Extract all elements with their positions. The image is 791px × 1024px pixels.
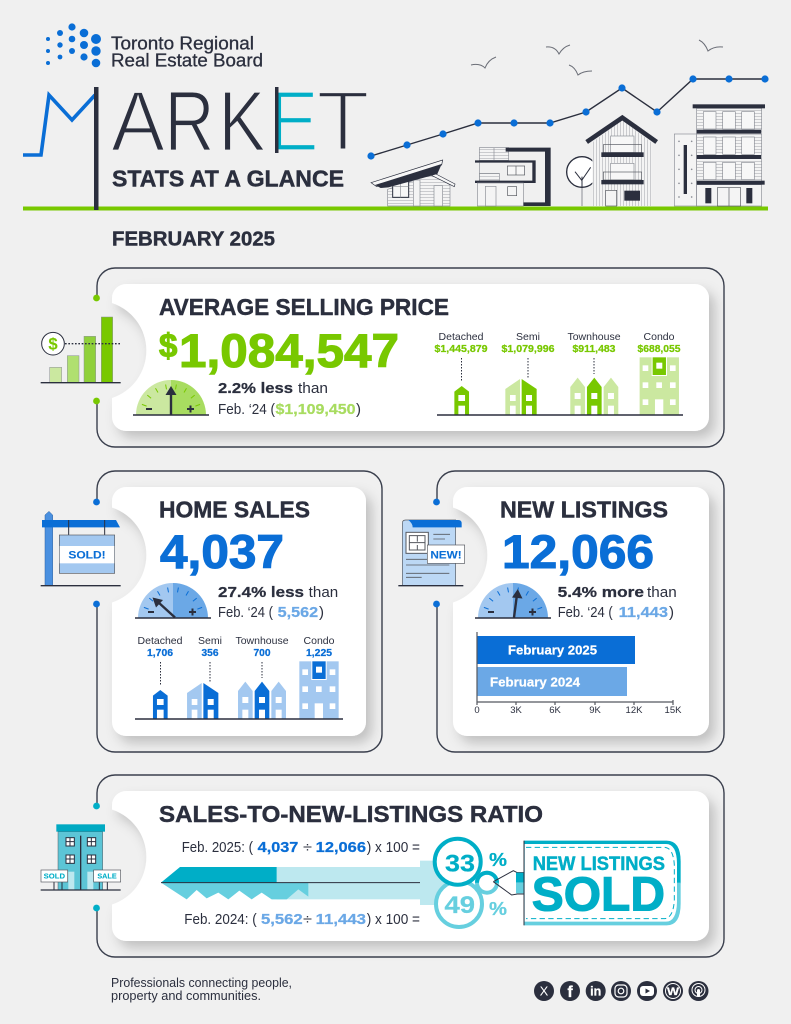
footer tagline bbox=[111, 976, 292, 1003]
comparison text: Feb. ‘24 ( bbox=[218, 401, 275, 418]
green ground line bbox=[23, 206, 768, 210]
bar chart: new listings comparison: 9K bbox=[589, 705, 601, 716]
result rings 33% and 49%: % bbox=[489, 899, 507, 919]
big number: 1,084,547 bbox=[179, 324, 399, 377]
logo: Toronto Regional Real Estate Board: Real Estate Board bbox=[111, 50, 263, 70]
formula 2025: 4,037 bbox=[258, 840, 298, 856]
formula 2024: Feb. 2024: ( bbox=[184, 912, 257, 928]
formula 2025: ) x 100 = bbox=[367, 840, 420, 856]
heading: HOME SALES bbox=[159, 496, 310, 522]
house: gabled bbox=[587, 118, 657, 206]
house illustrations bbox=[371, 104, 765, 206]
comparison text: than bbox=[298, 380, 328, 397]
bar chart: new listings comparison: 3K bbox=[510, 705, 522, 716]
icon: condo building with signs bbox=[41, 824, 121, 890]
social media icons: f bbox=[567, 984, 573, 1001]
bar chart: new listings comparison: 12K bbox=[626, 705, 643, 716]
key graphic bbox=[161, 861, 463, 905]
comparison text: ) bbox=[669, 604, 674, 621]
result rings 33% and 49%: 49 bbox=[444, 892, 475, 919]
comparison text: Feb. ‘24 ( bbox=[218, 604, 273, 621]
social media icons: W bbox=[667, 986, 680, 998]
heading: SALES-TO-NEW-LISTINGS RATIO bbox=[159, 801, 543, 827]
house icons: price by type bbox=[437, 357, 683, 415]
birds bbox=[471, 40, 723, 75]
social media icons: X bbox=[540, 984, 549, 998]
property type prices: Detached bbox=[439, 331, 484, 343]
big number: $ bbox=[159, 327, 177, 364]
bar chart: new listings comparison: 6K bbox=[549, 705, 561, 716]
comparison text: 5,562 bbox=[278, 604, 318, 621]
formula 2024: 11,443 bbox=[316, 912, 366, 928]
tag text: NEW LISTINGS bbox=[533, 854, 665, 875]
property type counts: Condo bbox=[304, 635, 335, 647]
comparison text: 5.4% more bbox=[558, 584, 644, 601]
bar chart: new listings comparison: February 2025 bbox=[508, 642, 597, 658]
property type prices: Townhouse bbox=[567, 331, 621, 343]
gauge bbox=[475, 583, 551, 618]
panel: home sales bbox=[41, 471, 382, 752]
panel: average selling price bbox=[41, 268, 724, 447]
icon: bar chart with dollar: $ bbox=[48, 335, 58, 354]
comparison text: ) bbox=[319, 604, 324, 621]
property type counts: 356 bbox=[202, 647, 219, 659]
formula 2024: ) x 100 = bbox=[367, 912, 420, 928]
property type prices: Condo bbox=[644, 331, 675, 343]
icon: new listing document bbox=[398, 520, 465, 586]
comparison text: 11,443 bbox=[619, 604, 668, 621]
formula 2025: ÷ bbox=[303, 840, 312, 856]
title: MARKET: K bbox=[218, 74, 266, 170]
icon: condo building with signs: SALE bbox=[97, 872, 117, 881]
logo: Toronto Regional Real Estate Board: Toronto Regional bbox=[111, 34, 254, 54]
property type prices bbox=[434, 331, 681, 355]
social media icons: in bbox=[590, 984, 601, 998]
bar chart: new listings comparison: February 2024 bbox=[490, 674, 581, 690]
formula 2025: 12,066 bbox=[316, 840, 366, 856]
house: modern box bbox=[475, 148, 551, 206]
rising line chart with dots bbox=[367, 75, 769, 160]
icon: condo building with signs: SOLD bbox=[44, 872, 65, 881]
bar chart: new listings comparison: 0 bbox=[474, 705, 480, 716]
social media icons bbox=[534, 981, 708, 1001]
property type counts: Semi bbox=[198, 635, 222, 647]
subtitle: STATS AT A GLANCE bbox=[112, 166, 344, 192]
property type prices: Semi bbox=[516, 331, 540, 343]
heading: NEW LISTINGS bbox=[500, 496, 668, 522]
tag text: SOLD bbox=[532, 869, 665, 922]
comparison text: Feb. ‘24 ( bbox=[558, 604, 613, 621]
icon: new listing document: NEW! bbox=[430, 549, 462, 561]
icon: sold sign bbox=[41, 511, 121, 586]
apartment building bbox=[674, 104, 765, 206]
title: MARKET bbox=[23, 74, 370, 170]
comparison text: $1,109,450 bbox=[276, 401, 356, 418]
panel: sales-to-new-listings ratio bbox=[41, 775, 724, 957]
title: MARKET: T bbox=[316, 74, 370, 170]
comparison text: ) bbox=[356, 401, 361, 418]
result rings 33% and 49%: % bbox=[489, 850, 507, 870]
house: slanted roof bbox=[371, 160, 455, 206]
sold tag bbox=[493, 841, 681, 925]
comparison text: than bbox=[647, 584, 677, 601]
property type counts: 1,706 bbox=[147, 647, 173, 659]
property type counts: 1,225 bbox=[306, 647, 332, 659]
bar chart: new listings comparison bbox=[474, 632, 682, 716]
formula 2025: Feb. 2025: ( bbox=[182, 840, 253, 856]
title: MARKET: R bbox=[164, 74, 214, 170]
property type prices: $688,055 bbox=[638, 343, 681, 355]
formula 2024: 5,562 bbox=[261, 912, 303, 928]
icon: sold sign: SOLD! bbox=[68, 549, 106, 561]
big number: 4,037 bbox=[160, 525, 284, 578]
house icons: sales by type bbox=[135, 661, 343, 719]
logo: Toronto Regional Real Estate Board bbox=[46, 23, 263, 70]
date heading: FEBRUARY 2025 bbox=[112, 228, 275, 250]
gauge bbox=[133, 380, 209, 415]
property type prices: $911,483 bbox=[572, 343, 616, 355]
property type prices: $1,079,996 bbox=[502, 343, 555, 355]
dark vertical bar of M bbox=[94, 87, 98, 210]
tree bbox=[567, 157, 597, 206]
property type counts: 700 bbox=[254, 647, 271, 659]
footer tagline: property and communities. bbox=[111, 989, 261, 1003]
title: MARKET: E bbox=[269, 74, 318, 170]
title: MARKET: A bbox=[111, 74, 165, 170]
gauge bbox=[135, 583, 211, 618]
panel: new listings bbox=[398, 471, 724, 752]
comparison text: than bbox=[309, 584, 338, 601]
result rings 33% and 49% bbox=[435, 839, 507, 927]
property type counts: Townhouse bbox=[235, 635, 289, 647]
property type counts: Detached bbox=[138, 635, 183, 647]
result rings 33% and 49%: 33 bbox=[445, 851, 475, 878]
formula 2024: ÷ bbox=[303, 912, 312, 928]
footer tagline: Professionals connecting people, bbox=[111, 976, 292, 990]
property type prices: $1,445,879 bbox=[434, 343, 488, 355]
comparison text: 27.4% less bbox=[218, 584, 304, 601]
property type counts bbox=[138, 635, 335, 659]
heading: AVERAGE SELLING PRICE bbox=[159, 294, 449, 320]
big number: 12,066 bbox=[502, 525, 654, 578]
icon: bar chart with dollar bbox=[41, 317, 121, 383]
bar chart: new listings comparison: 15K bbox=[665, 705, 682, 716]
comparison text: 2.2% less bbox=[218, 380, 293, 397]
